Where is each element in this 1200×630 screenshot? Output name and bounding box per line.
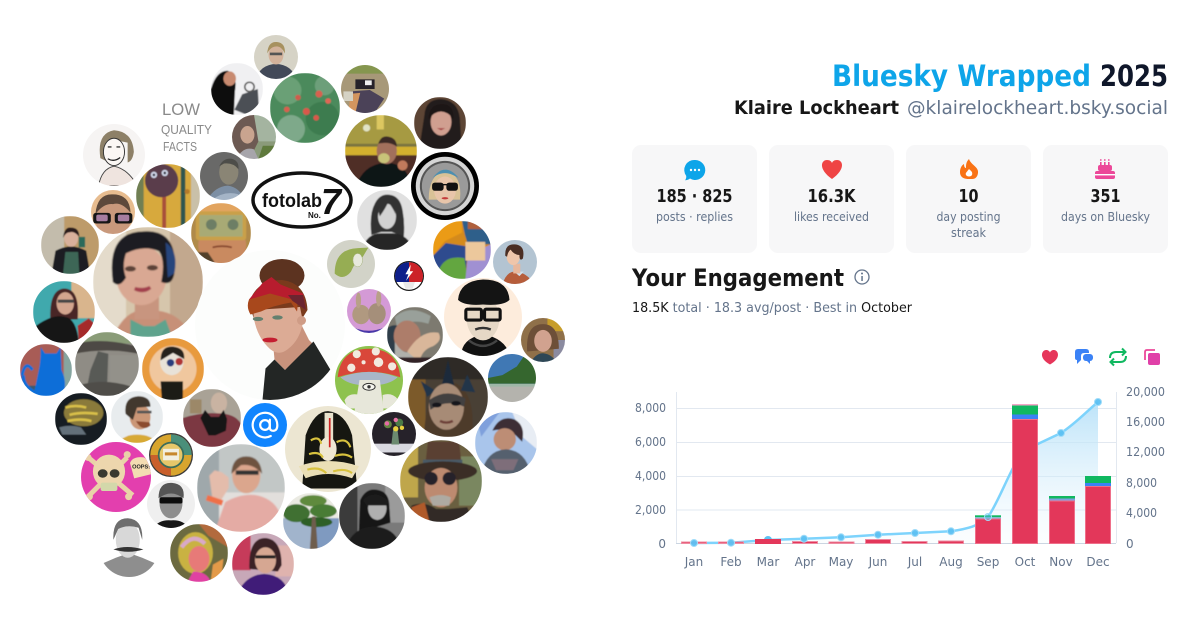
- right axis labels: 8,000: [1126, 476, 1157, 490]
- avatar: river and forest landscape: [488, 354, 536, 402]
- stat card: likes received: [769, 145, 894, 253]
- stacked bars: [682, 404, 1111, 544]
- avatar: black and white woman portrait: [357, 190, 417, 250]
- avatar: woman looking up at sky: [475, 412, 537, 474]
- avatar: low quality facts handwriting: [150, 94, 212, 154]
- left axis labels: [635, 401, 666, 551]
- avatar: cartoon person on light blue: [493, 240, 537, 284]
- left axis labels: 8,000: [635, 401, 666, 415]
- stat card: posting streak: streak: [951, 225, 987, 240]
- month labels: Nov: [1049, 555, 1073, 569]
- stat card: likes received: 16.3K: [808, 187, 857, 207]
- avatar: green plant with red flowers: [270, 73, 340, 143]
- avatar: goats in field: [341, 65, 389, 113]
- month labels: [684, 555, 1110, 569]
- right axis labels: 4,000: [1126, 506, 1157, 520]
- avatar: man in black beret and glasses: [444, 278, 522, 356]
- avatar: skull and crossbones on pink: [81, 442, 151, 512]
- icon: cake: [1095, 159, 1115, 179]
- avatar: puppet on yellow door: [136, 164, 200, 228]
- avatar: dark haired woman bookshelf: [414, 97, 466, 149]
- title: Bluesky Wrapped: [832, 59, 1091, 93]
- right axis labels: 12,000: [1126, 445, 1165, 459]
- avatar: fotolab logo: fotolab: [262, 191, 322, 212]
- title: 2025: [1100, 59, 1168, 93]
- avatar: engraved mustache man: [104, 518, 154, 577]
- area under cumulative line: [694, 402, 1098, 543]
- stat card: days on Bluesky: days on Bluesky: [1061, 209, 1151, 224]
- stat card: posting streak: [906, 145, 1031, 253]
- avatar: grayscale man in sunglasses: [147, 480, 195, 528]
- avatar: red mushroom cartoon: [335, 346, 403, 414]
- left axis labels: 2,000: [635, 503, 666, 517]
- avatar: flower bouquet on dark background: [372, 412, 416, 456]
- avatar: woman with glasses teal background: [33, 281, 95, 343]
- avatar: green pear painting: [327, 240, 375, 288]
- avatar: man in fedora and round glasses: [400, 440, 482, 522]
- avatar: man drinking from cup in bar: [345, 115, 417, 187]
- month labels: Sep: [977, 555, 999, 569]
- avatar cluster: [20, 35, 565, 595]
- marker: March, behind bar: [764, 536, 772, 544]
- cumulative line: [694, 402, 1098, 543]
- avatar: woman in purple shirt: [232, 533, 294, 595]
- avatar: painted old man portrait: [200, 152, 248, 200]
- avatar: pencil sketch woman: [83, 124, 145, 186]
- month labels: Apr: [795, 555, 815, 569]
- profile name and handle: [734, 97, 1168, 119]
- avatar: man wearing yellow magnifier mask: [191, 203, 251, 263]
- avatar: at symbol default avatar: [243, 403, 287, 447]
- avatar: bearded man with dog: [387, 307, 443, 363]
- month labels: Feb: [720, 555, 742, 569]
- avatar: two rabbits on purple: [347, 289, 391, 333]
- avatar: woman with motorcycle: [211, 63, 263, 115]
- bar: Dec: [1085, 476, 1111, 544]
- avatar: man holding black cat: [183, 389, 241, 447]
- avatar: woman in black rectangular glasses: [91, 190, 135, 234]
- stat card: posting streak: 10: [958, 187, 978, 207]
- heading: your engagement: Your Engagement: [631, 264, 844, 292]
- icon: likes: [1042, 350, 1058, 364]
- avatar: woman taking mirror selfie: [41, 216, 99, 274]
- avatar: colorful mandala: [149, 433, 193, 477]
- left axis labels: 6,000: [635, 435, 666, 449]
- stat card: posts and replies: 185 · 825: [656, 187, 732, 207]
- left axis labels: 4,000: [635, 469, 666, 483]
- avatar: smiling woman with curly hair: [521, 318, 565, 362]
- engagement chart: [635, 385, 1165, 569]
- month labels: Mar: [757, 555, 779, 569]
- icon: quotes: [1145, 350, 1160, 365]
- avatar: low quality facts handwriting: FACTS: [163, 139, 197, 154]
- avatar: black and white woman with bangs: [339, 483, 405, 549]
- icon: reposts: [1110, 348, 1126, 366]
- avatar: skull and crossbones on pink: OOPS!: [132, 465, 150, 471]
- avatar: main profile woman with red bandana: [198, 256, 330, 400]
- bar: Sep: [975, 515, 1001, 544]
- avatar: low quality facts handwriting: LOW: [162, 100, 200, 119]
- avatar: grey shirt person: [254, 35, 298, 79]
- line markers: [690, 398, 1102, 546]
- icon: chat bubble: [684, 160, 705, 180]
- avatar: bonsai tree: [283, 493, 339, 549]
- avatar: waving woman in pink shirt: [197, 444, 285, 532]
- right axis labels: 16,000: [1126, 415, 1165, 429]
- month labels: Aug: [939, 555, 963, 569]
- month labels: May: [829, 555, 853, 569]
- month labels: Jan: [684, 555, 703, 569]
- profile name and handle: Klaire Lockheart: [734, 97, 899, 119]
- stat card: likes received: likes received: [794, 209, 869, 224]
- right axis labels: 0: [1126, 537, 1134, 551]
- grid lines: [676, 392, 1116, 544]
- avatar: large woman with dark bangs: [93, 227, 203, 337]
- icon: replies: [1075, 349, 1093, 364]
- stat card: posts and replies: posts · replies: [656, 209, 733, 224]
- bars: Jan to Aug: [682, 540, 964, 544]
- right axis labels: 20,000: [1126, 385, 1165, 399]
- avatar: bearded man in profile: [111, 391, 163, 443]
- stat card: posts and replies: [632, 145, 757, 253]
- icon: info: [855, 270, 869, 284]
- bar: Nov: [1049, 496, 1075, 544]
- chart legend icons: [1042, 348, 1160, 366]
- avatar: fotolab logo: No.: [308, 211, 321, 220]
- stat card: posting streak: day posting: [936, 209, 1000, 224]
- bar: Oct: [1012, 404, 1038, 544]
- engagement summary: 18.5K total · 18.3 avg/post · Best in October: [632, 300, 912, 316]
- avatar: fotolab logo: [253, 173, 351, 227]
- avatar: blue cat on brick wall: [20, 344, 72, 396]
- icon: flame: [960, 159, 978, 179]
- avatar: woman with glasses outdoors: [232, 115, 276, 159]
- avatar: orange sunburst drawing: [142, 338, 204, 400]
- avatar: woman with horns and face paint: [408, 357, 488, 437]
- avatar: stone dolmen rock: [75, 332, 139, 396]
- avatar: yellow pattern on black: [55, 393, 107, 445]
- stat card: days on Bluesky: 351: [1090, 187, 1120, 207]
- avatar: psychedelic portrait: [170, 524, 228, 582]
- avatar: colorful stained pattern: [433, 221, 491, 279]
- avatar: grateful dead steal your face: [394, 261, 424, 291]
- month labels: Jun: [868, 555, 887, 569]
- icon: heart: [822, 160, 842, 179]
- month labels: Dec: [1086, 555, 1110, 569]
- avatar: fotolab logo: 7: [321, 181, 343, 222]
- month labels: Oct: [1015, 555, 1036, 569]
- right axis labels: [1126, 385, 1165, 551]
- avatar: illustrated woman sunglasses with black ring: [411, 152, 479, 220]
- avatar: low quality facts handwriting: QUALITY: [161, 122, 212, 137]
- left axis labels: 0: [658, 537, 666, 551]
- avatar: yellow and black scribble portrait: [285, 406, 371, 492]
- profile name and handle: @klairelockheart.bsky.social: [907, 97, 1168, 119]
- stat card: days on Bluesky: [1043, 145, 1168, 253]
- month labels: Jul: [907, 555, 922, 569]
